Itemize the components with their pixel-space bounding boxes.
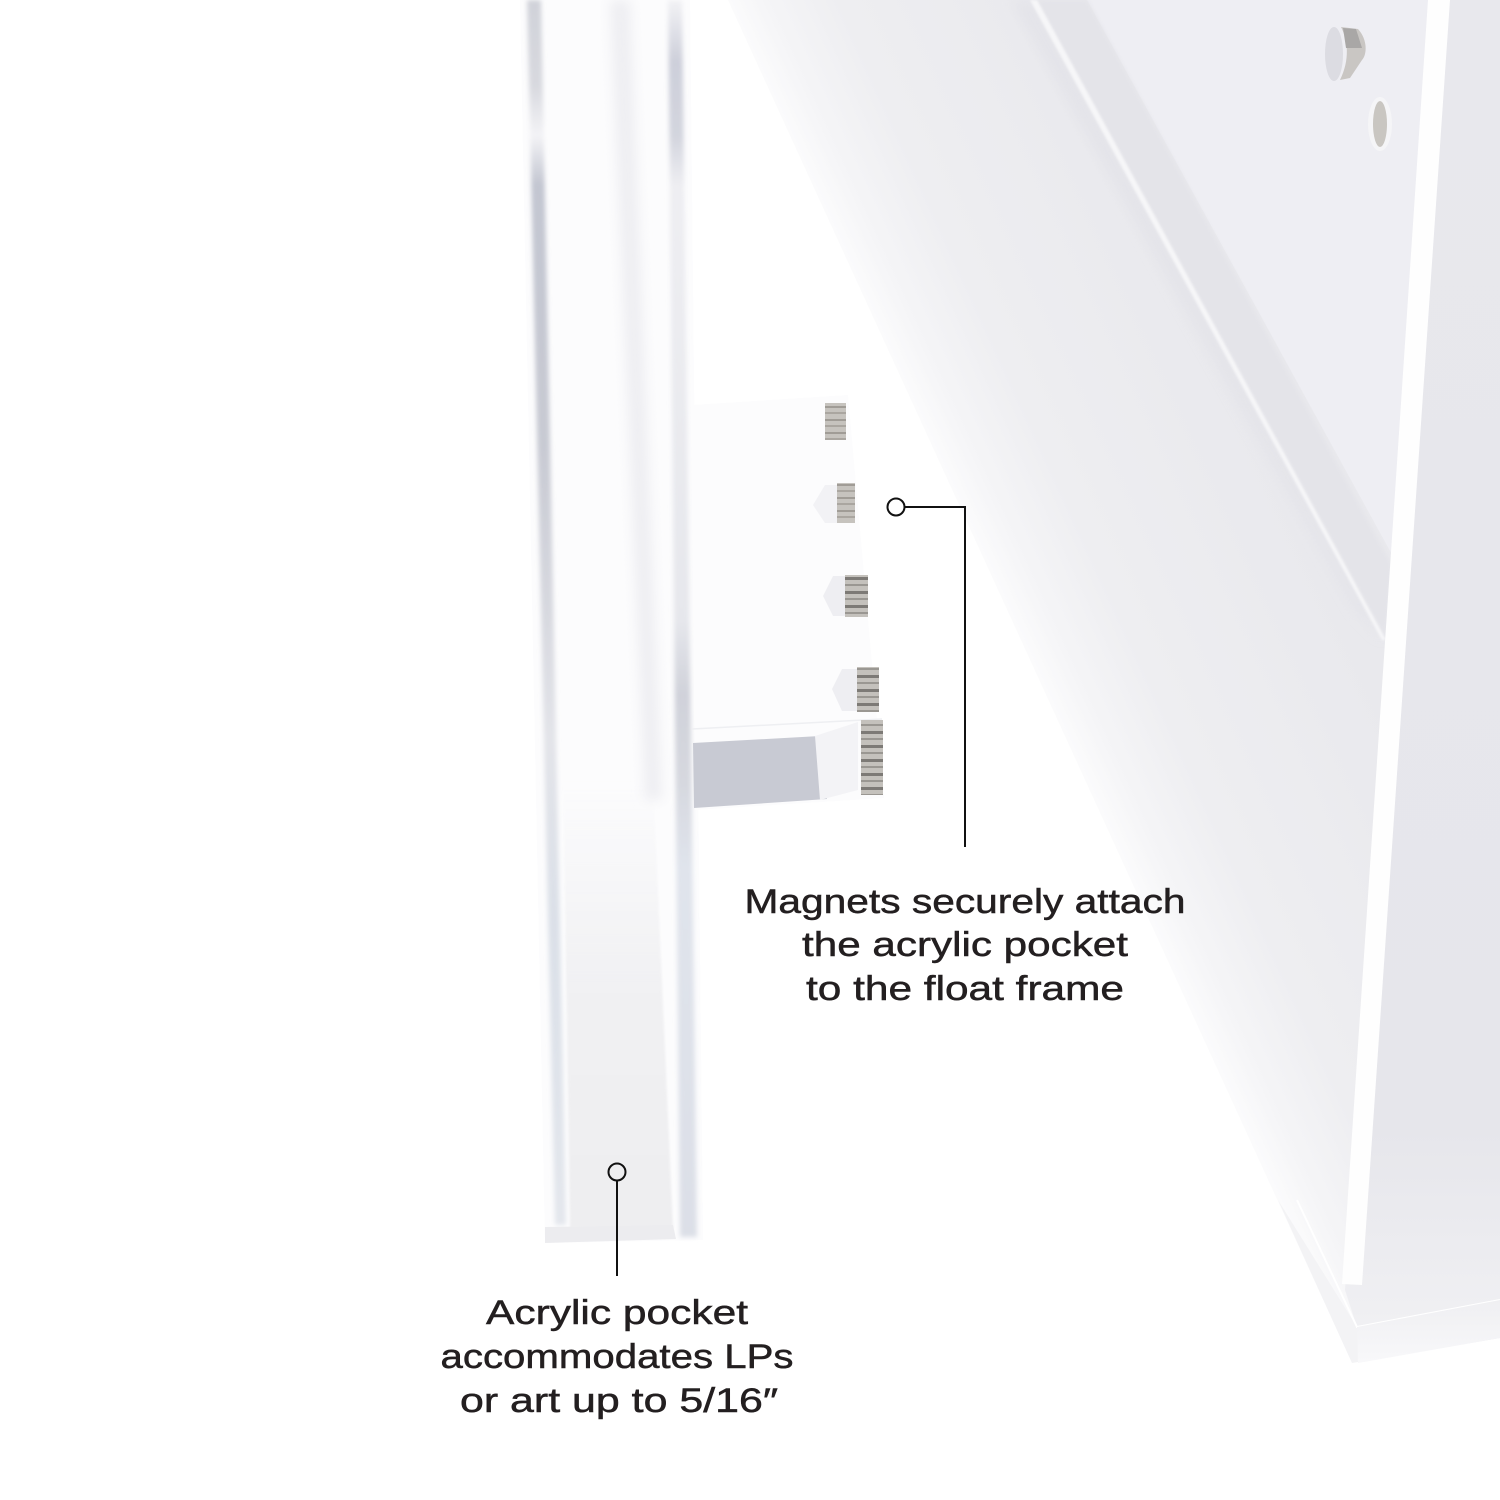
frame magnet small: [1368, 97, 1392, 151]
callout text: Magnets securely attach: [744, 883, 1186, 921]
callout text: to the float frame: [806, 970, 1124, 1008]
acrylic pocket: [520, 0, 703, 1243]
acrylic magnet block: [692, 395, 884, 810]
magnet 5: [861, 720, 883, 795]
magnet 3: [823, 575, 868, 617]
marker and leader line: [608, 1164, 626, 1276]
magnet 1: [825, 403, 846, 440]
callout text: [440, 1294, 794, 1420]
callout: acrylic pocket: [440, 1164, 794, 1420]
callout text: accommodates LPs: [440, 1338, 794, 1376]
callout text: or art up to 5/16″: [460, 1382, 778, 1420]
frosted inner channel: [563, 780, 673, 1228]
callout text: Acrylic pocket: [486, 1294, 749, 1332]
callout: magnets: [744, 498, 1186, 1008]
white acrylic edge strip: [1342, 0, 1450, 1285]
float frame: [728, 0, 1500, 1363]
callout text: the acrylic pocket: [802, 926, 1129, 964]
marker and leader line: [888, 498, 965, 847]
magnet 2: [813, 483, 855, 523]
magnet 4: [832, 667, 879, 712]
grey reflection: [693, 736, 827, 808]
callout text: [744, 883, 1186, 1008]
frame base lip: [1278, 1200, 1500, 1363]
frame magnet large: [1325, 27, 1366, 81]
